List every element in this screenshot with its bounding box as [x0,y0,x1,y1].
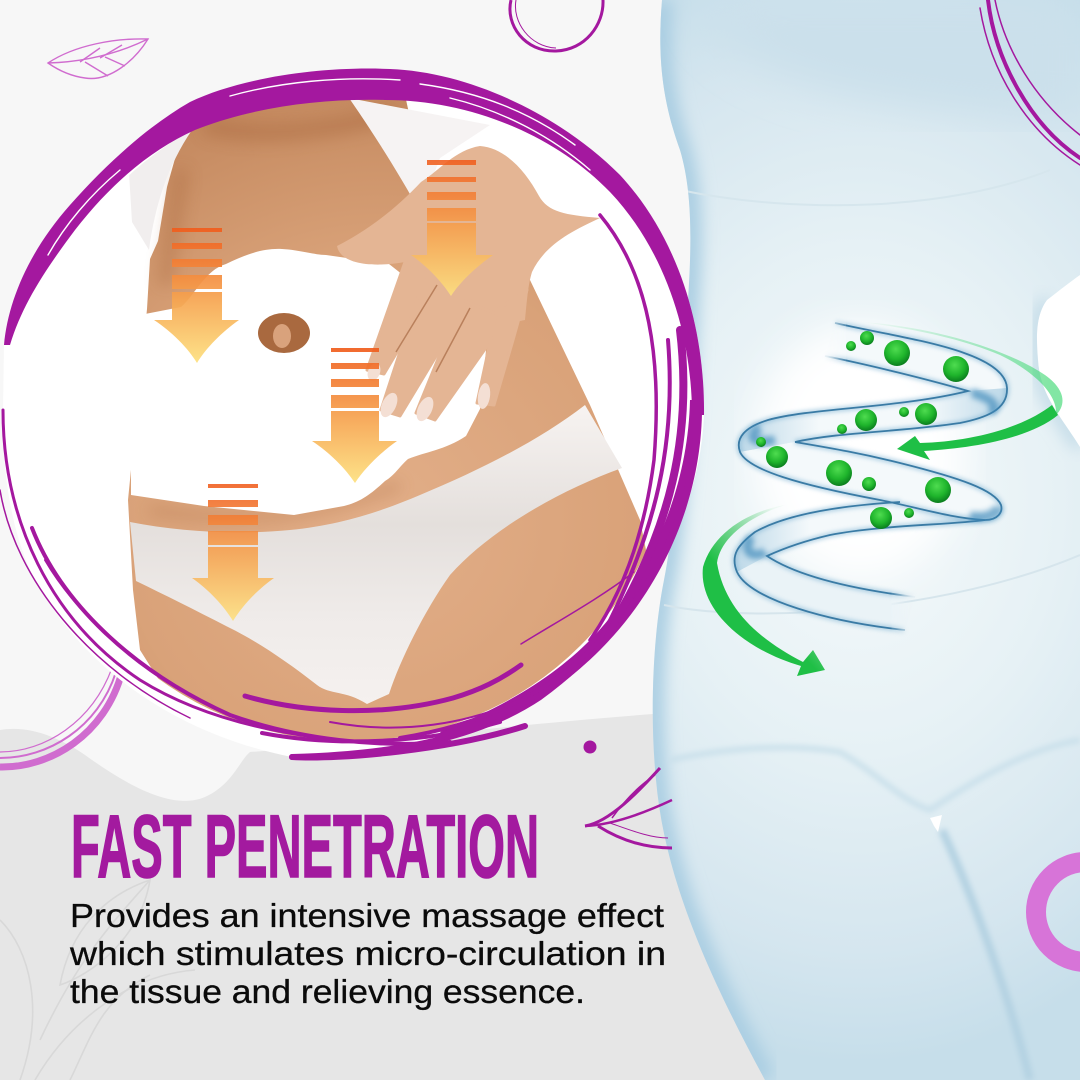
leaf icon, top left [48,39,148,78]
heavy lower right band [440,400,702,738]
skin of torso and thighs [128,95,660,745]
grey lower background blob [0,712,800,1080]
gap between thighs [930,815,942,832]
grey leaf outlines, lower left [0,880,195,1080]
white briefs [130,405,622,704]
heat arrow 3 [312,348,397,483]
pink ring, bottom right [1036,862,1080,962]
green flow arrow, lower left [703,505,825,676]
hand with spread fingers [337,146,600,424]
left shirt [129,128,192,250]
heat arrow 4 [192,484,274,621]
thick upper band [4,69,704,415]
fragment of other hand near top [165,100,250,122]
tube inner glow [734,323,1007,630]
heading: FAST PENETRATION [71,796,539,896]
purple brush ring, top right [980,0,1080,165]
heat arrow 1 [154,228,239,363]
dna helix [734,323,1007,630]
purple leaf, right of text [585,768,672,848]
white area behind photo [3,69,704,757]
torso shadows [150,112,400,517]
pink brush arc, lower left [0,668,122,767]
green flow arrow, right [860,322,1062,460]
heat arrow 2 [411,160,493,296]
photo: torso wearing patch [128,95,660,745]
green particles [756,331,969,529]
description text: which stimulates micro-circulation in [69,935,666,972]
description text: the tissue and relieving essence. [70,973,585,1010]
description text: Provides an intensive massage effect [70,897,664,934]
purple dot [584,740,596,754]
purple ring, top [510,0,603,51]
description text [69,897,666,1010]
tube shadows at turns [748,393,998,555]
tube edges [734,323,1007,630]
white abdominal patch [131,249,487,515]
tube bodies [734,323,1007,630]
right shirt [350,100,490,194]
navel cut-out [258,313,310,353]
white area beside the waist [1020,265,1080,465]
purple brush ring [0,69,704,758]
brush streaks in white [48,79,680,365]
body silhouette [653,0,1080,1080]
body shading [653,0,1080,1080]
